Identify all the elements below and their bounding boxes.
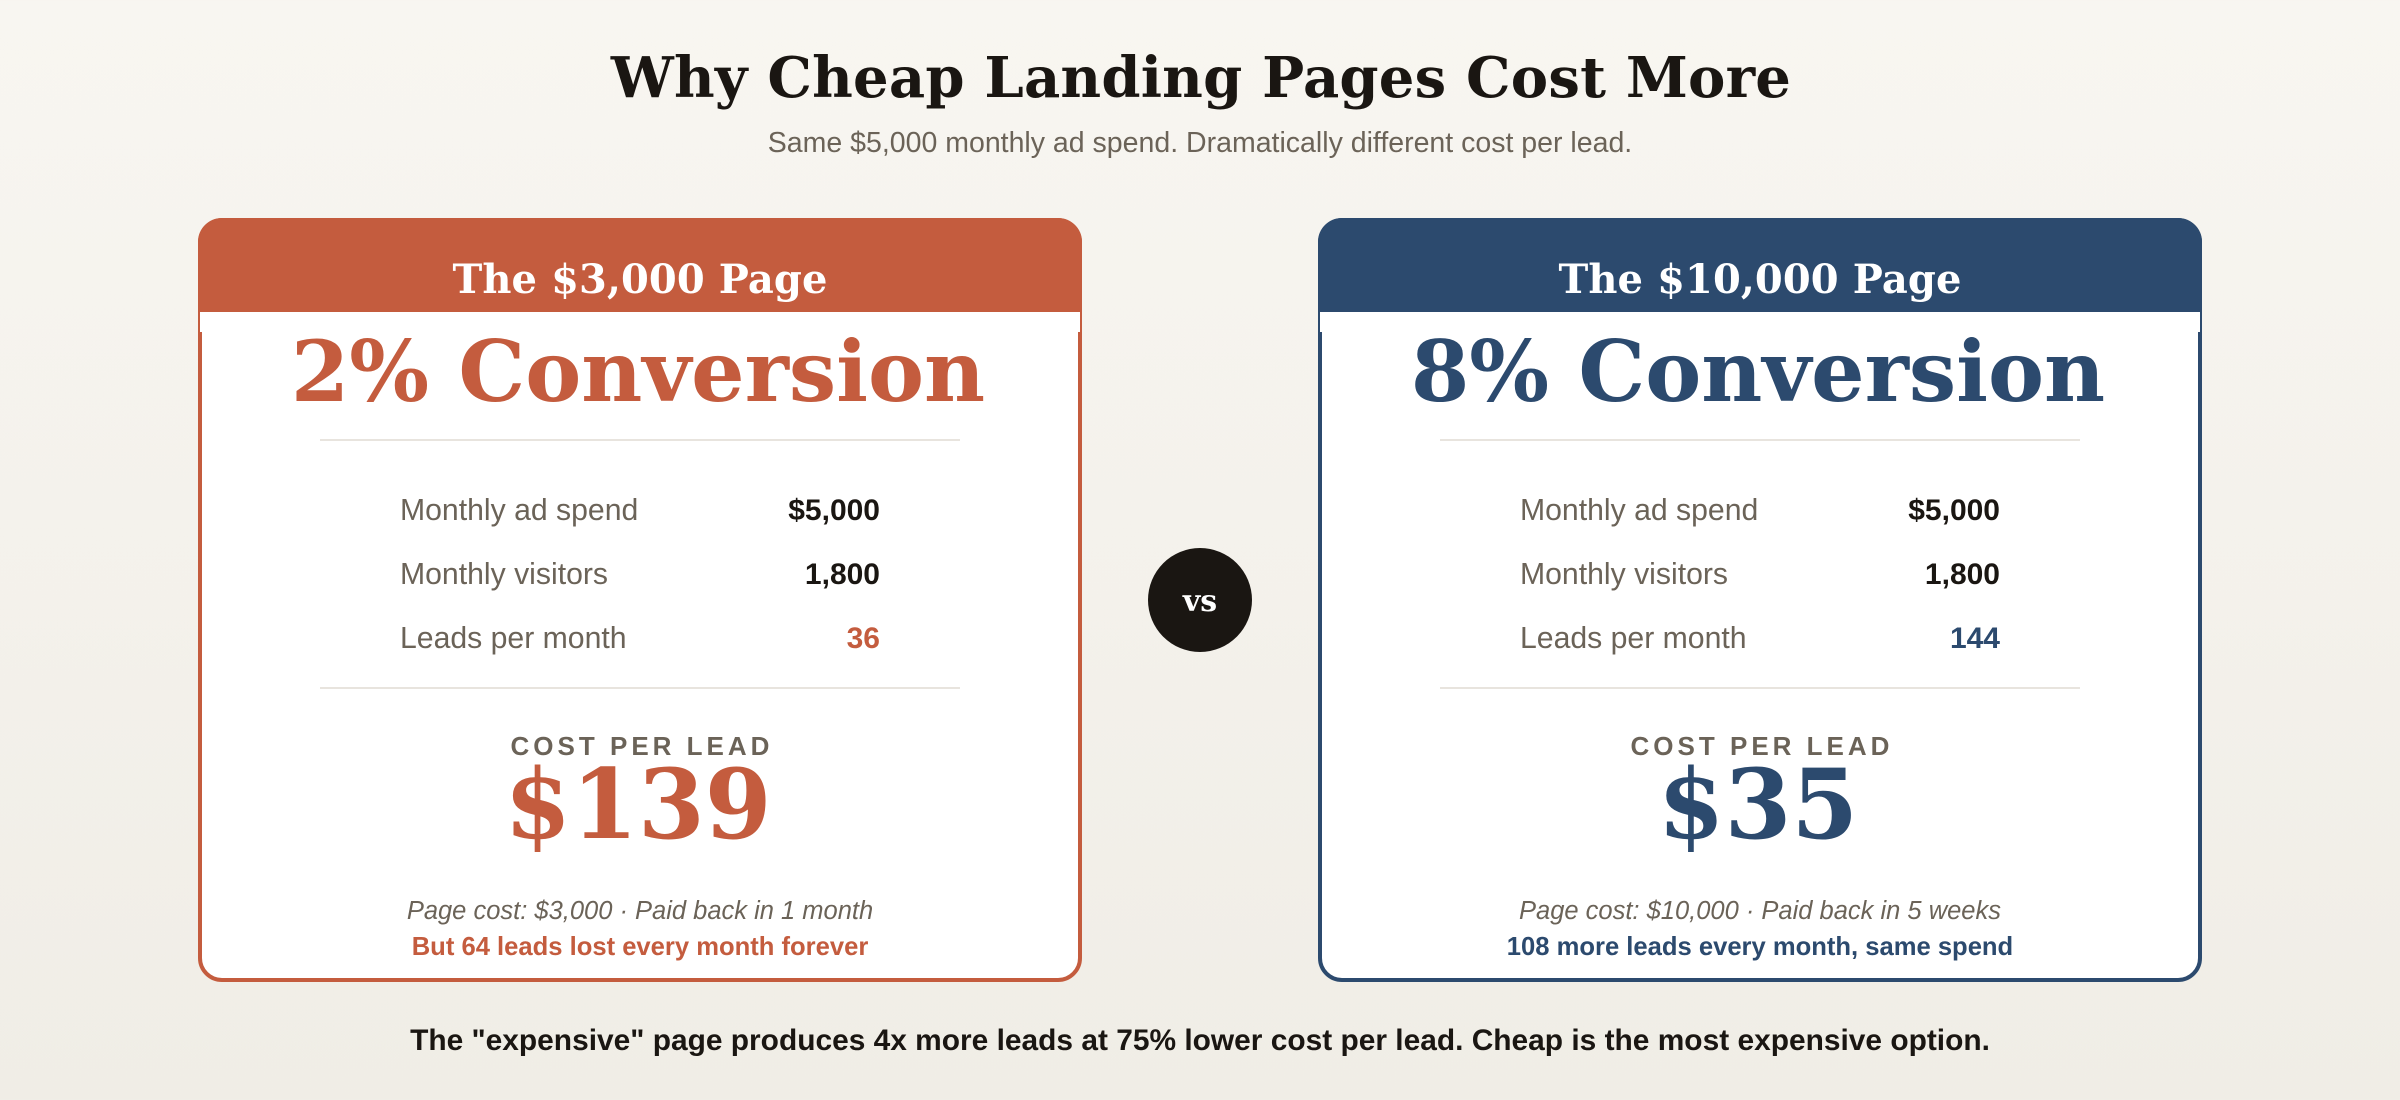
- cost per lead label: COST PER LEAD: [1631, 731, 1893, 761]
- stat: monthly visitors label: Monthly visitors: [1520, 558, 1728, 591]
- stat rows: [1520, 494, 2000, 655]
- extra leads note: 108 more leads every month, same spend: [1507, 933, 2013, 961]
- stat: monthly ad spend value: $5,000: [1908, 494, 2000, 527]
- stat: leads per month label: Leads per month: [1520, 622, 1747, 655]
- stat rows: [400, 494, 880, 655]
- stat: monthly visitors label: Monthly visitors: [400, 558, 608, 591]
- panel: the $10,000 page: [1318, 218, 2202, 982]
- stat: leads per month value: 36: [847, 622, 880, 655]
- vs text: vs: [1183, 584, 1217, 619]
- stat: monthly ad spend value: $5,000: [788, 494, 880, 527]
- cost per lead value: $139: [504, 748, 772, 861]
- stat: leads per month value: 144: [1950, 622, 2000, 655]
- cost per lead value: $35: [1658, 748, 1858, 861]
- stat: monthly ad spend label: Monthly ad spend: [1520, 494, 1758, 527]
- bottom takeaway: The "expensive" page produces 4x more leads at 75% lower cost per lead. Cheap is the most expensive option.: [410, 1024, 1990, 1057]
- conversion rate: 2% Conversion: [291, 322, 985, 421]
- subtitle: Same $5,000 monthly ad spend. Dramatically different cost per lead.: [768, 127, 1632, 159]
- lost leads note: But 64 leads lost every month forever: [412, 933, 868, 961]
- panel header: the $10,000 page: [1318, 218, 2202, 312]
- stat: monthly visitors value: 1,800: [1925, 558, 2000, 591]
- cost per lead label: COST PER LEAD: [511, 731, 773, 761]
- conversion rate: 8% Conversion: [1411, 322, 2105, 421]
- payback note: Page cost: $3,000 · Paid back in 1 month: [407, 897, 873, 925]
- heading: the $10,000 page: The $10,000 Page: [1558, 256, 1962, 303]
- payback note: Page cost: $10,000 · Paid back in 5 weeks: [1519, 897, 2001, 925]
- stat: leads per month label: Leads per month: [400, 622, 627, 655]
- title: Why Cheap Landing Pages Cost More: [611, 45, 1791, 111]
- vs badge: [1148, 548, 1252, 652]
- panel header: the $3,000 page: [198, 218, 1082, 312]
- heading: the $3,000 page: The $3,000 Page: [452, 256, 828, 303]
- panel: the $3,000 page: [198, 218, 1082, 982]
- stat: monthly ad spend label: Monthly ad spend: [400, 494, 638, 527]
- stat: monthly visitors value: 1,800: [805, 558, 880, 591]
